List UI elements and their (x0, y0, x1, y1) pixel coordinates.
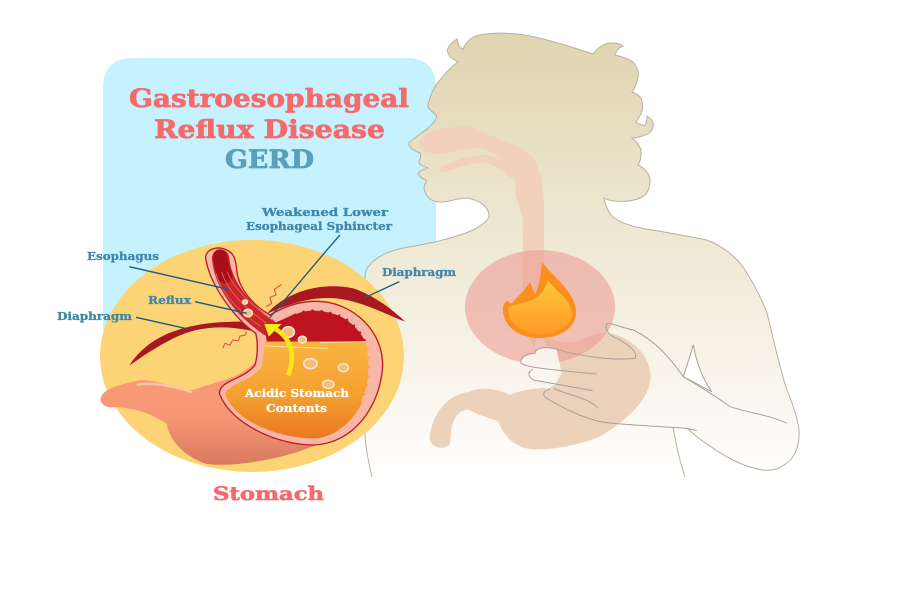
title: GERD (225, 145, 314, 174)
ghost stomach (430, 333, 651, 449)
burning area circle (465, 250, 615, 364)
label: acidic stomach contents: Contents (266, 402, 327, 415)
blue title panel (103, 58, 436, 330)
diaphragm left (129, 322, 255, 366)
label: diaphragm left: Diaphragm (57, 310, 132, 323)
label: stomach: Stomach (213, 483, 324, 505)
duodenum highlight (137, 384, 192, 392)
icon: flame (503, 262, 576, 338)
leader lines (129, 235, 399, 328)
label: weakened lower esophageal sphincter: Weakened Lower (261, 206, 388, 219)
esophagus lumen (221, 258, 268, 327)
person silhouette (365, 33, 799, 477)
label: weakened lower esophageal sphincter (246, 206, 392, 233)
fluid surface highlight (265, 342, 367, 348)
label: diaphragm right: Diaphragm (382, 266, 456, 279)
title: Gastroesophageal (129, 84, 409, 113)
diaphragm right (267, 286, 405, 322)
acidic fluid (225, 342, 370, 438)
stomach cross-section illustration (101, 235, 405, 465)
bubbles (243, 300, 348, 388)
label: esophagus: Esophagus (87, 250, 159, 263)
stomach outer body and duodenum (101, 360, 317, 465)
stomach illustration circle (100, 240, 404, 472)
label: reflux: Reflux (148, 294, 191, 307)
gas pocket (265, 309, 367, 342)
label: acidic stomach contents (244, 387, 349, 415)
ghost esophagus and airway (419, 126, 544, 347)
title (129, 84, 409, 174)
scalloped stomach lining (297, 309, 370, 403)
hand outline (521, 323, 787, 431)
title: Reflux Disease (154, 115, 385, 144)
reflux arrow (264, 324, 292, 375)
label: acidic stomach contents: Acidic Stomach (244, 387, 349, 400)
stomach and esophagus wall (206, 248, 383, 445)
irritation squiggles (223, 284, 282, 348)
label: weakened lower esophageal sphincter: Esophageal Sphincter (246, 220, 392, 233)
